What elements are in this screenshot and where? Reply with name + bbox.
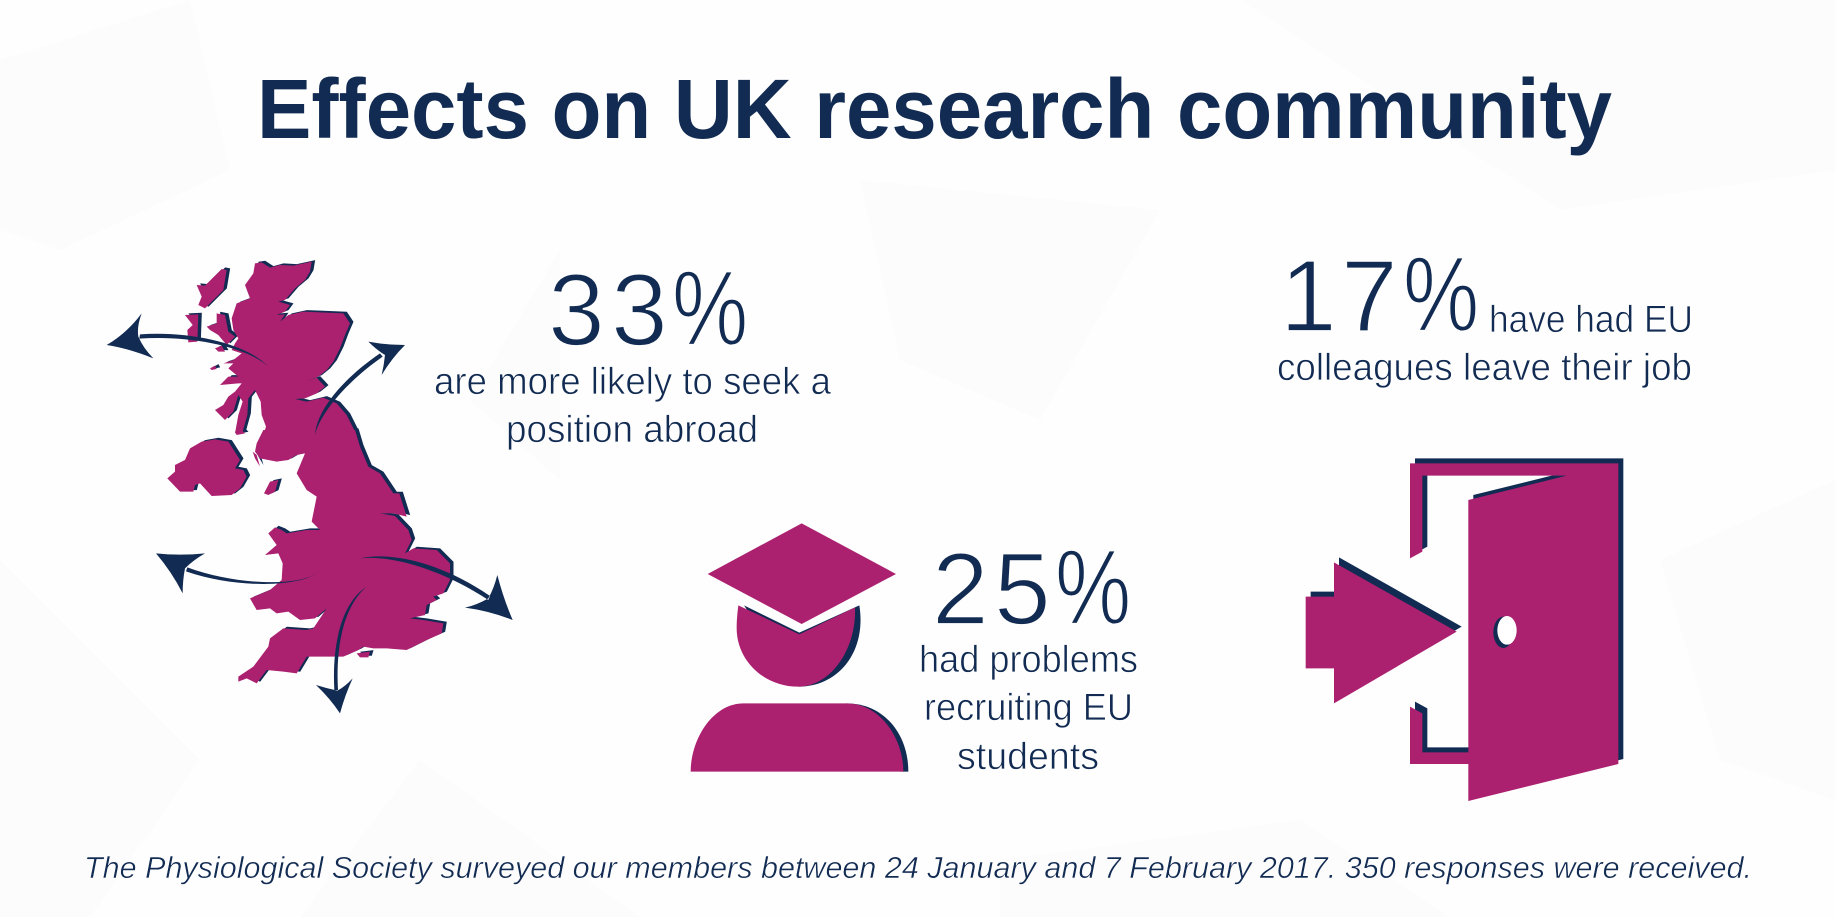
- title: Effects on UK research community: [257, 62, 1612, 156]
- caption: have had EU colleagues leave their job: have had EU: [1489, 299, 1693, 341]
- statistic: 25%: 5: [994, 532, 1051, 646]
- panel: EU colleagues leaving: [1277, 234, 1693, 801]
- statistic: 33%: %: [672, 248, 748, 368]
- icon: UK map with outward arrows: [167, 260, 453, 683]
- caption: had problems recruiting EU students: [919, 639, 1138, 778]
- icon: exit door with arrow: [1306, 458, 1623, 801]
- statistic: 17%: %: [1403, 234, 1479, 354]
- statistic: 17%: 7: [1341, 239, 1398, 353]
- panel: UK map statistic: [107, 248, 832, 713]
- caption: have had EU colleagues leave their job: [1277, 299, 1693, 389]
- icon: graduate with mortarboard: [691, 523, 908, 772]
- caption: position abroad: position abroad: [506, 409, 758, 451]
- statistic: 33%: 3: [548, 253, 605, 367]
- statistic: 33%: [548, 248, 748, 368]
- panel: recruiting EU students: [691, 523, 1138, 778]
- statistic: 25%: [932, 527, 1131, 647]
- arrow: east: [360, 556, 513, 620]
- arrows leaving the UK: [107, 313, 513, 713]
- statistic: 17%: 1: [1280, 239, 1337, 353]
- arrow: west: [156, 553, 320, 593]
- caption: had problems recruiting EU students: recruiting EU: [924, 687, 1133, 729]
- caption: had problems recruiting EU students: had problems: [919, 639, 1138, 681]
- arrow: north-west: [107, 313, 268, 367]
- statistic: 25%: 2: [932, 532, 989, 646]
- footer note: The Physiological Society surveyed our members between 24 January and 7 February 2017. 350 responses were received.: [84, 850, 1752, 885]
- statistic: 17%: [1280, 234, 1479, 354]
- statistic: 25%: %: [1055, 527, 1131, 647]
- caption: had problems recruiting EU students: students: [957, 736, 1099, 778]
- caption: position abroad: [434, 361, 832, 451]
- arrow: south: [316, 587, 367, 713]
- caption: have had EU colleagues leave their job: colleagues leave their job: [1277, 347, 1692, 389]
- caption: position abroad: are more likely to seek a: [434, 361, 832, 403]
- statistic: 33%: 3: [611, 253, 668, 367]
- arrow: north-east: [315, 342, 405, 435]
